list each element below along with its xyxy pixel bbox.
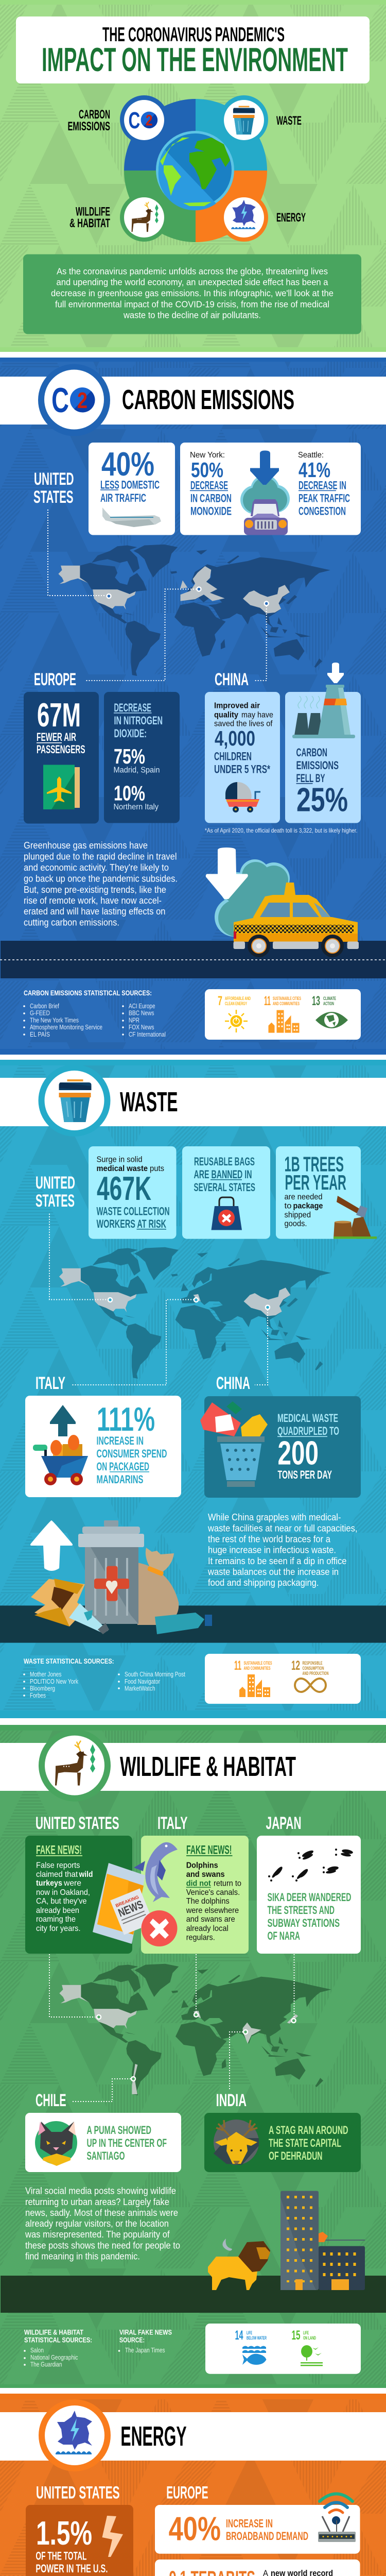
card: italy fake news dolphins: regulars. [186,1933,215,1942]
card: trees for packaging: package [293,1202,323,1211]
card: us fake news turkeys: turkeys [36,1879,62,1888]
card: less domestic air traffic: AIR TRAFFIC [100,492,146,504]
panel: carbon emissions background [0,358,386,1055]
sources: wildlife: The Japan Times [125,2347,165,2354]
sources: waste: Forbes [30,1692,46,1699]
sources: waste: South China Morning Post [125,1671,185,1678]
card: us fake news turkeys: FAKE NEWS! [36,1843,82,1857]
label: europe: EUROPE [166,2483,208,2503]
card: carbon emissions fell: 25% [296,781,348,818]
card: japan sika deer: SUBWAY STATIONS [268,1917,340,1929]
card: medical waste workers: Surge in solid [97,1156,142,1164]
icon: smoke and truck [240,475,290,535]
card: india stag [204,2113,361,2172]
card: trees for packaging: are needed [284,1193,322,1201]
card: nitrogen dioxide decrease: IN NITROGEN [114,714,163,727]
labels: countries: UNITED STATES [36,1814,119,1833]
sources: carbon emissions: G-FEED [30,1010,50,1017]
card: medical waste workers: 467K [97,1170,151,1207]
icon: lightning bolt [102,2516,123,2557]
card: china medical waste: 200 [278,1434,319,1471]
map connectors and pins: carbon [48,510,269,681]
card: fewer air passengers [24,692,99,823]
sources: carbon emissions: FOX News [129,1024,154,1031]
body text: carbon emissions: Greenhouse gas emissions have [24,840,148,851]
sources: waste: Bloomberg [30,1685,55,1692]
SDG badges: carbon emissions: AND COMMUNITIES [273,1001,300,1006]
body text: wildlife: these posts shows the need for people to [25,2240,180,2250]
card: reusable bags banned [182,1146,270,1239]
label: india: INDIA [216,2091,247,2110]
header panel background [0,0,386,352]
body text: wildlife: news, sadly. Most of these animals were [25,2208,178,2218]
icon: white up arrow [30,1520,73,1571]
card: medical waste workers [89,1146,176,1239]
card: children saved: saved the lives of [214,720,273,728]
SDG badges: wildlife: 15 [291,2328,301,2343]
card: nitrogen dioxide decrease: Northern Italy [113,803,159,811]
heading: energy: ENERGY [120,2421,187,2452]
sources: carbon emissions: The New York Times [30,1017,79,1024]
label: united states: STATES [33,487,73,507]
icon: up arrow [50,1405,76,1436]
SDG badges: waste: 12 [291,1658,300,1673]
body text: waste: It remains to be seen if a dip in office [208,1556,347,1566]
body text: carbon emissions: erated and will have lasting effects on [24,906,166,917]
sources: waste: MarketWatch [125,1685,155,1692]
card: fewer air passengers: PASSENGERS [37,743,85,756]
heading: waste [0,1064,386,1137]
card: new york and seattle traffic: DECREASE [190,479,228,492]
card: italy fake news dolphins: FAKE NEWS! [186,1843,232,1857]
sources: waste: POLITICO New York [30,1678,79,1685]
SDG badges: carbon emissions: 11 [264,994,271,1008]
icon: down arrow [250,450,279,485]
card: italy fake news dolphins: return to [214,1879,241,1888]
card: italy fake news dolphins: Dolphins [186,1861,218,1870]
card: new york and seattle traffic: 50% [191,458,223,482]
card: carbon emissions fell: FELL BY [296,772,325,785]
SDG badges: carbon emissions: 7 [218,994,222,1008]
card: italy packaged mandarins: 111% [97,1400,155,1438]
heading: energy [0,2399,386,2471]
SDG badges: wildlife: LIFE [247,2330,252,2335]
card: china medical waste [200,1396,361,1498]
intro text panel [23,255,361,334]
card: children saved: 4,000 [215,726,255,750]
diagram label: carbon emissions: CARBON [79,108,110,122]
card: us fake news turkeys: now in Oakland, [36,1888,90,1897]
illustration: taxi with smoke and arrow [206,848,359,957]
label: china: CHINA [216,1374,250,1393]
card: children saved: quality [214,711,238,719]
label: united states: UNITED STATES [36,2483,119,2503]
panel: wildlife and habitat background [0,1725,386,2388]
icon: banned bag [211,1197,242,1230]
card: italy fake news dolphins: and swans are [186,1915,235,1924]
SDG badges: waste [205,1654,361,1704]
card: nitrogen dioxide decrease: DIOXIDE: [114,727,147,740]
card: nitrogen dioxide decrease: 75% [114,744,145,768]
card: japan sika deer: OF NARA [268,1929,300,1942]
sources: waste: Mother Jones [30,1671,62,1678]
card: new york and seattle traffic: Seattle: [298,451,324,460]
card: nitrogen dioxide decrease: Madrid, Spain [113,766,160,775]
illustration: overflowing trash [30,1520,212,1634]
body text: wildlife: already regular visitors, or the location [25,2218,169,2229]
labels: countries: JAPAN [266,1814,302,1833]
SDG badges: waste: AND COMMUNITIES [244,1666,271,1671]
sources: wildlife [24,2329,172,2368]
label: europe: EUROPE [34,670,76,689]
card: data centers power use [26,2505,133,2576]
body text: wildlife: Viral social media posts showing wildlife [25,2185,176,2196]
card: us fake news turkeys: roaming the [36,1915,76,1924]
labels: countries: ITALY [157,1814,188,1833]
card: us fake news turkeys: claimed that [36,1870,78,1879]
icon: axe and stumps [334,1196,377,1239]
title [16,16,370,83]
card: nitrogen dioxide decrease: 10% [114,781,145,805]
card: new york and seattle traffic: DECREASE IN [299,479,346,492]
card: china medical waste: QUADRUPLED TO [277,1425,339,1437]
body text: wildlife: was misrepresented. The popularity of [25,2229,170,2240]
diagram label: energy: ENERGY [276,211,306,225]
sources: carbon emissions: CF International [129,1031,166,1038]
card: medical waste workers: medical waste [97,1164,148,1173]
card: italy fake news dolphins: did not [186,1879,211,1888]
panel: energy background [0,2394,386,2576]
body text: carbon emissions: go back up once the pandemic subsides. [24,873,178,884]
card: children saved [205,692,280,823]
sources: wildlife: VIRAL FAKE NEWS [119,2329,172,2336]
SDG badges: waste: SUSTAINABLE CITIES [244,1660,272,1666]
diagram label: carbon emissions: EMISSIONS [68,120,110,133]
SDG badges: wildlife [205,2324,361,2374]
road: carbon [0,941,386,978]
card: less domestic air traffic: 40% [101,445,154,483]
body text: waste: waste balances out the increase in [207,1567,339,1577]
icon: airplane [102,507,161,527]
SDG badges: wildlife: LIFE [303,2330,309,2335]
illustration: lion and city [208,2191,365,2290]
card: broadband demand: INCREASE IN [226,2517,273,2530]
sources: carbon emissions [23,989,166,1038]
icon: dolphin [134,1842,178,1902]
sources: wildlife: WILDLIFE & HABITAT [24,2329,84,2336]
body text: wildlife: find meaning in this pandemic. [25,2251,140,2262]
card: data centers power use: 1.5% [36,2514,92,2552]
icon: shopping cart [33,1435,88,1485]
intro text panel: decrease in greenhouse gas emissions. In this infographic, we'll look at the [51,288,334,298]
card: chile puma: SANTIAGO [86,2149,125,2162]
diagram label: wildlife and habitat: WILDLIFE [76,205,110,218]
card: children saved: Improved air [214,702,260,710]
sources: waste: Food Navigator [125,1678,160,1685]
card: new york and seattle traffic [180,443,361,535]
card: italy fake news dolphins: were elsewhere [186,1906,239,1915]
body text: waste [207,1512,357,1588]
heading: wildlife and habitat [0,1730,386,1802]
icon: hoof prints [268,1849,354,1882]
sources: carbon emissions: NPR [129,1017,139,1024]
intro text panel: and upending the world economy, an unexpected side effect has been a [57,277,328,287]
card: nitrogen dioxide decrease [104,692,180,823]
sources: wildlife: STATISTICAL SOURCES: [24,2336,92,2344]
card: italy packaged mandarins [25,1396,181,1497]
card: japan sika deer: THE STREETS AND [268,1904,335,1917]
card: broadband demand: 40% [169,2510,221,2548]
card: broadband demand: BROADBAND DEMAND [226,2530,308,2543]
heading: waste: WASTE [120,1087,178,1117]
card: data centers power use: OF THE TOTAL [36,2549,86,2562]
world map: waste [59,1247,331,1379]
card: carbon emissions fell [285,663,361,823]
card: medical waste workers: WASTE COLLECTION [97,1205,170,1218]
sources: wildlife: The Guardian [30,2361,62,2368]
card: china medical waste: MEDICAL WASTE [277,1412,338,1425]
card: italy fake news dolphins [134,1836,249,1954]
card: japan sika deer [257,1836,361,1954]
icon: factory with arrow [292,663,355,738]
sources: carbon emissions: BBC News [129,1010,154,1017]
label: united states: UNITED [36,1173,75,1193]
icon: climate eye [315,1012,348,1028]
card: us fake news turkeys: CA, but they've [36,1897,87,1906]
icon: phone with breaking news and x mark: NEWS [116,1898,145,1919]
card: us fake news turkeys: wild [79,1870,93,1879]
card: medical waste workers: WORKERS AT RISK [97,1217,166,1230]
card: italy packaged mandarins: ON PACKAGED [97,1460,149,1473]
card: trees for packaging: shipped [284,1211,311,1219]
sources: carbon emissions: EL PAÍS [30,1030,50,1038]
card: fewer air passengers: FEWER AIR [37,731,76,743]
sources: carbon emissions: Atmosphere Monitoring Service [30,1024,102,1031]
SDG badges: carbon emissions: ACTION [323,1001,334,1006]
card: italy packaged mandarins: CONSUMER SPEND [97,1447,167,1460]
card: data centers power use: POWER IN THE U.S. [36,2562,108,2575]
card: children saved: UNDER 5 YRS* [214,763,270,776]
card: india stag: OF DEHRADUN [269,2149,322,2162]
card: carbon emissions fell: CARBON [296,746,327,759]
card: broadband demand [155,2494,360,2554]
label: united states [36,1173,75,1211]
card: new york and seattle traffic: CONGESTION [299,505,346,517]
sources: carbon emissions: CARBON EMISSIONS STATISTICAL SOURCES: [24,989,152,997]
SDG badges: carbon emissions: CLEAN ENERGY [225,1001,247,1006]
icon: phone with breaking news and x mark [93,1863,177,1946]
intro text panel: waste to the decline of air pollutants. [123,310,261,320]
card: children saved: may have [241,711,273,719]
icon: stroller [225,782,260,812]
icon: fish and water [242,2346,267,2365]
sources: wildlife: Salon [30,2347,44,2354]
SDG badges: waste: 11 [234,1658,241,1673]
SDG badges: wildlife: ON LAND [303,2335,316,2341]
card: italy fake news dolphins: already local [186,1924,229,1933]
body text: carbon emissions: cutting carbon emissions. [24,917,119,927]
card: us fake news turkeys: city for years. [36,1924,80,1933]
card: china medical waste: TONS PER DAY [278,1468,332,1481]
heading: carbon emissions [0,364,386,436]
world map: carbon emissions [58,545,330,676]
card: italy packaged mandarins: MANDARINS [97,1473,143,1486]
card: italy fake news dolphins: Venice's canals. [186,1888,240,1897]
card: new york and seattle traffic: 41% [299,458,330,482]
icon: wifi router [318,2494,356,2542]
card: trees for packaging: 1B TREES [284,1152,344,1176]
icon: phone with breaking news and x mark: BREAKING [115,1894,139,1908]
SDG badges: wildlife: BELOW WATER [247,2335,267,2341]
card: italy fake news dolphins: The dolphins [186,1897,230,1906]
body text: carbon emissions: rise of remote work, have now accel- [24,895,162,906]
card: chile puma: A PUMA SHOWED [86,2124,151,2137]
icon: white down arrow [206,848,248,899]
label: italy: ITALY [36,1374,65,1393]
map connectors and pins: wildlife [49,1954,296,2102]
body text: wildlife: returning to urban areas? Largely fake [25,2197,169,2207]
body text: waste: While China grapples with medical- [208,1512,341,1522]
road: waste [0,1605,386,1643]
card: new york and seattle traffic: New York: [190,451,225,460]
card: nitrogen dioxide decrease: DECREASE [114,701,151,714]
globe [156,131,234,210]
panel: waste background [0,1060,386,1718]
SDG badges: waste: AND PRODUCTION [303,1671,328,1676]
card: children saved: CHILDREN [214,750,252,763]
card: reusable bags banned: REUSABLE BAGS [194,1155,255,1168]
card: reusable bags banned: ARE BANNED IN [194,1168,252,1181]
label: china: CHINA [215,670,249,689]
card: us fake news turkeys: were [63,1879,81,1888]
label: united states: STATES [36,1191,75,1211]
card: reusable bags banned: SEVERAL STATES [194,1181,255,1194]
icon: passport [43,765,80,809]
card: trees for packaging [276,1146,377,1239]
sources: waste: WASTE STATISTICAL SOURCES: [24,1657,114,1665]
card: medical waste workers: puts [150,1164,164,1173]
SDG badges: carbon emissions [205,989,361,1040]
road: wildlife [1,2276,386,2313]
card: india stag: THE STATE CAPITAL [269,2137,341,2149]
body text: waste: waste facilities at near or full capacities, [207,1523,357,1533]
central globe diagram [120,95,268,242]
intro text panel: full environmental impact of the COVID-19 crisis, from the rise of medical [55,299,329,309]
SDG badges: waste: RESPONSIBLE [303,1660,322,1666]
icon: tree and land [301,2345,323,2366]
icon: stag [214,2120,259,2165]
card: us fake news turkeys: already been [36,1906,79,1915]
card: italy fake news dolphins: and swans [186,1870,225,1879]
body text: wildlife [25,2185,180,2262]
label: chile: CHILE [36,2091,66,2110]
footnote: *As of April 2020, the official death toll is 3,322, but is likely higher. [205,827,357,834]
card: trees for packaging: to [284,1202,292,1211]
body text: carbon emissions: plunged due to the rapid decline in travel [24,852,177,862]
body text: carbon emissions: and economic activity. They're likely to [24,862,169,873]
SDG badges: carbon emissions: AFFORDABLE AND [225,996,251,1001]
diagram label: wildlife and habitat: & HABITAT [69,216,110,230]
card: us fake news turkeys [25,1836,132,1954]
card: new york and seattle traffic: IN CARBON [190,492,232,505]
icon: medical waste basket [200,1401,268,1487]
icon: puma [35,2121,77,2166]
sources: carbon emissions: ACI Europe [129,1003,155,1010]
SDG badges: carbon emissions: SUSTAINABLE CITIES [273,996,301,1001]
sources: wildlife: National Geographic [30,2354,78,2361]
labels: countries [36,1814,302,1833]
intro text panel: As the coronavirus pandemic unfolds across the globe, threatening lives [57,266,328,276]
SDG badges: waste: CONSUMPTION [303,1666,324,1671]
card: fewer air passengers: 67M [37,696,81,734]
card: new york and seattle traffic: MONOXIDE [190,505,232,517]
card: less domestic air traffic: LESS DOMESTIC [100,478,160,492]
sources: wildlife: SOURCE: [119,2336,145,2344]
body text: carbon emissions [24,840,178,927]
card: trees for packaging: goods. [284,1219,307,1228]
world map: wildlife [59,1964,331,2095]
body text: waste: food and shipping packaging. [208,1578,319,1588]
card: us fake news turkeys: False reports [36,1861,80,1870]
sources: carbon emissions: Carbon Brief [30,1003,59,1010]
SDG badges: carbon emissions: 13 [312,994,320,1008]
card: terabits per second [155,2560,360,2576]
SDG badges: wildlife: 14 [235,2328,243,2343]
body text: waste: the rest of the world braces for a [208,1534,331,1545]
SDG badges: carbon emissions: CLIMATE [323,996,336,1001]
card: less domestic air traffic [89,443,175,535]
diagram label: waste: WASTE [276,114,302,128]
sources: waste [23,1657,185,1699]
label: united states [33,469,74,507]
card: chile puma [25,2113,181,2172]
card: chile puma: UP IN THE CENTER OF [86,2137,167,2149]
map connectors and pins: waste [49,1214,270,1385]
diagram label: wildlife and habitat [69,205,110,230]
card: italy packaged mandarins: INCREASE IN [97,1434,144,1447]
card: carbon emissions fell: EMISSIONS [296,759,339,772]
body text: waste: huge increase in infectious waste. [208,1545,336,1555]
body text: carbon emissions: But, some pre-existing trends, like the [24,885,166,895]
card: new york and seattle traffic: PEAK TRAFFIC [299,492,350,505]
diagram label: carbon emissions [68,108,110,133]
label: united states: UNITED [34,469,74,489]
